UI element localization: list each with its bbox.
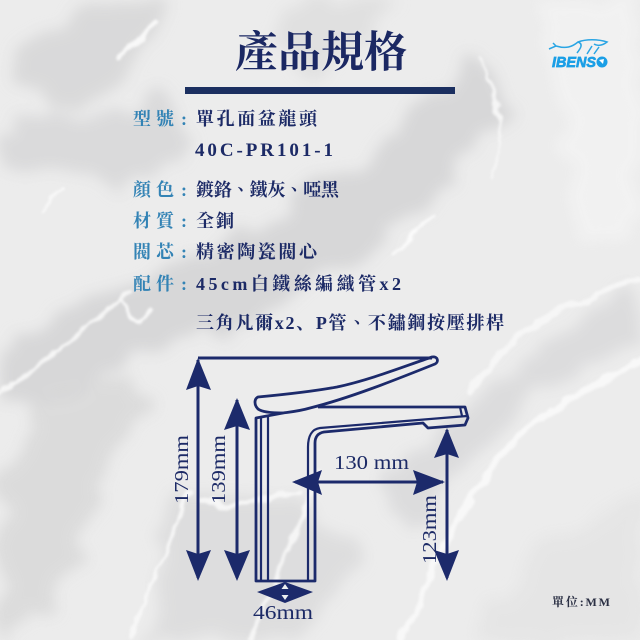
dimension: 139mm: 139mm [208,435,230,504]
dimension: 130 mm: 130 mm [334,452,409,474]
logo: IBENS: IBENS [552,54,596,71]
spec row: accessories: : [181,274,187,294]
title underline [185,87,455,94]
spec row: material [133,211,234,231]
spec row: model [133,109,333,161]
spec row: colour: : [181,180,187,200]
logo: IBENS [549,40,608,71]
unit note: 單位:MM [552,594,610,609]
spec row: model: 單孔面盆龍頭 [196,109,318,129]
dimension: 123mm: 123mm [419,495,441,564]
spec row: valve core [133,241,320,262]
dimension: 179mm: 179mm [171,435,193,504]
dimension: 123mm [419,428,459,581]
spec row: material: 材質 [133,211,176,231]
spec row: valve core: : [181,242,187,262]
dimension: 139mm [208,398,250,581]
dimension: 130 mm [292,452,445,495]
spec row: accessories [133,274,504,333]
spec row: model: 型號 [133,109,174,129]
spec row: accessories: 配件 [133,274,174,294]
dimension: 46mm [253,582,313,624]
spec row: material: 全銅 [196,211,234,231]
title: 產品規格 [235,29,407,77]
spec row: valve core: 閥芯 [133,241,176,262]
spec row: model: : [181,109,187,129]
dimension: 179mm [171,358,432,581]
dimension: 46mm: 46mm [253,602,313,624]
spec row: colour [133,180,340,200]
spec row: valve core: 精密陶瓷閥心 [196,241,320,262]
spec row: material: : [181,211,187,231]
spec row: model: 40C-PR101-1 [195,140,333,161]
faucet outline [255,357,468,581]
spec row: accessories: 45cm白鐵絲編織管x2 [196,274,401,294]
spec row: colour: 鍍鉻、鐵灰、啞黑 [196,180,340,200]
spec row: colour: 顏色 [133,180,174,200]
spec row: accessories: 三角凡爾x2、P管、不鏽鋼按壓排桿 [196,312,504,333]
